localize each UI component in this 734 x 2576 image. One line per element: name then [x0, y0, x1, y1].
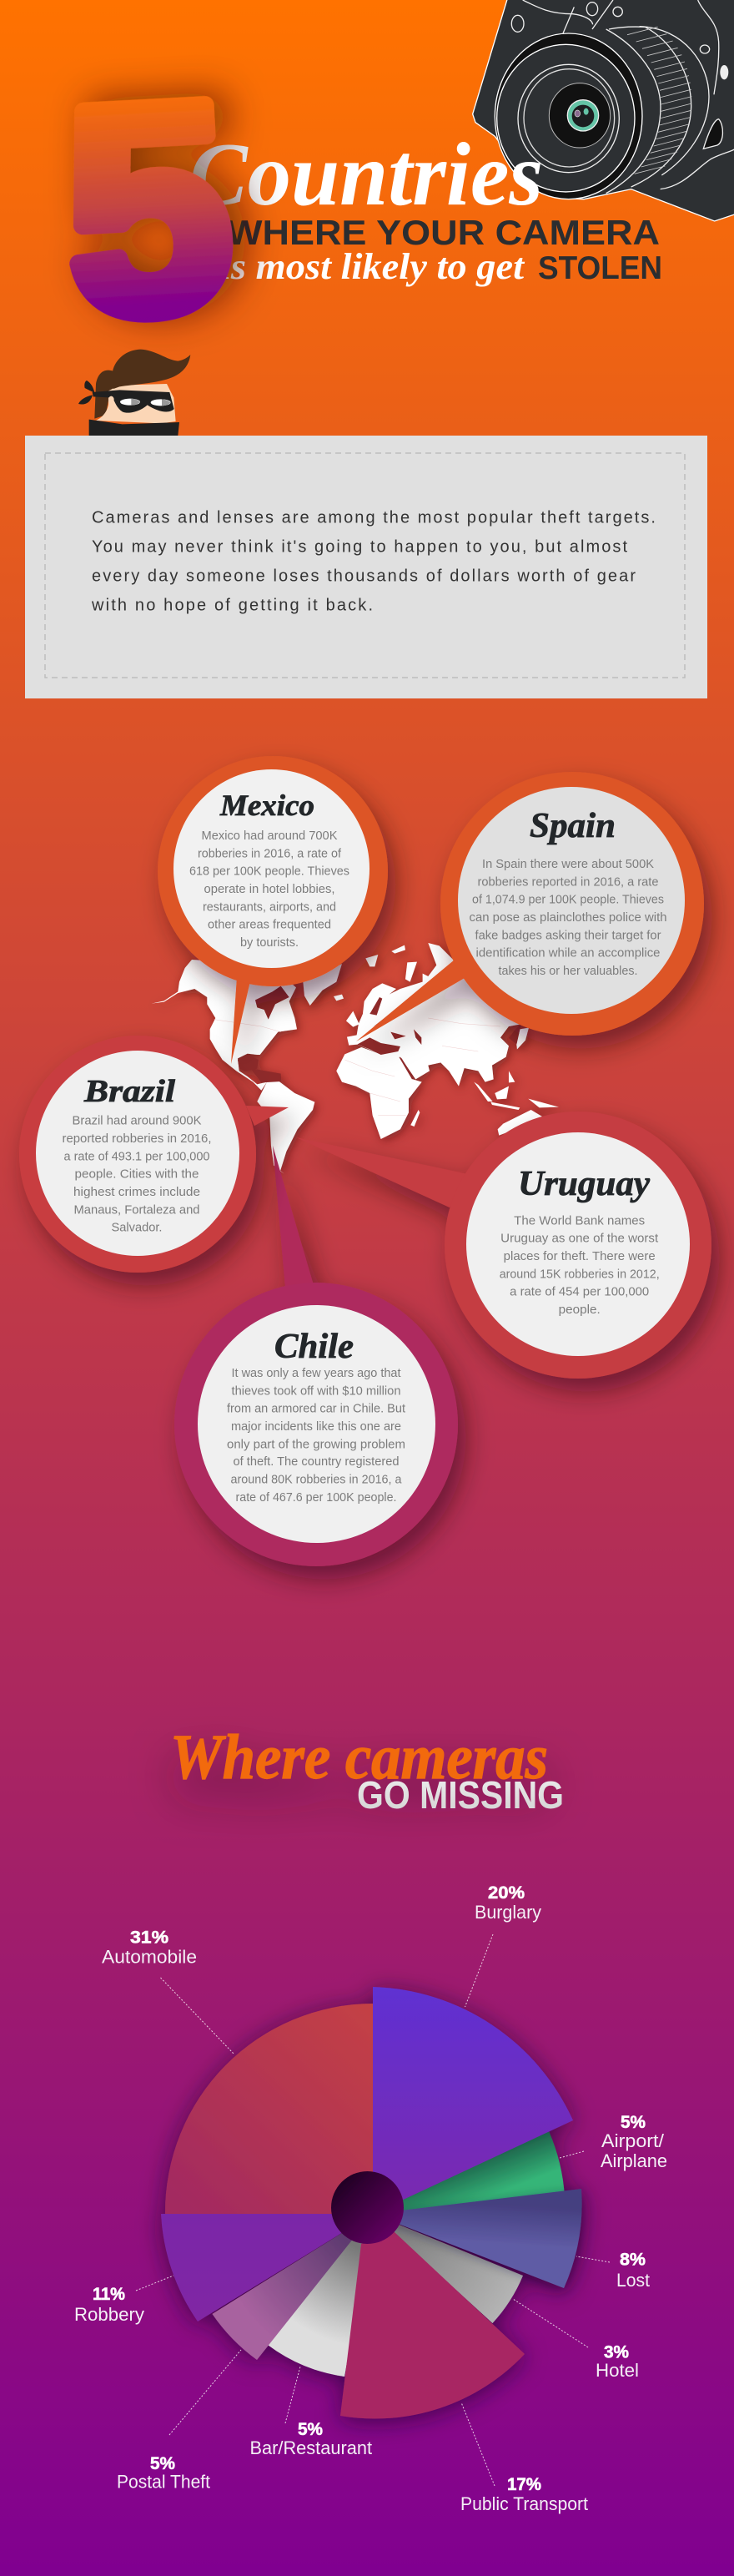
heading: Chile: Chile: [274, 1328, 354, 1366]
heading: Mexico: Mexico: [219, 789, 314, 822]
text: Chile description: only part of the growing problem: [227, 1438, 405, 1451]
text: Mexico description: Mexico had around 700K: [202, 829, 338, 843]
label: bar/restaurant 5%: [250, 2367, 372, 2458]
heading: where cameras: Where cameras: [170, 1722, 548, 1792]
label: public transport 17%: Public Transport: [460, 2493, 588, 2514]
text: Uruguay description: around 15K robberies in 2012,: [500, 1268, 660, 1281]
pie centre hole: [331, 2171, 404, 2244]
label: robbery 11%: Robbery: [74, 2304, 144, 2325]
text: Brazil description: people. Cities with the: [75, 1168, 199, 1182]
text: Chile description: of theft. The country registered: [234, 1455, 399, 1469]
slice: public transport: [340, 2231, 525, 2418]
callout: Mexico: [158, 756, 388, 1064]
label: public transport 17%: [460, 2402, 588, 2514]
text: Uruguay description: people.: [559, 1303, 601, 1317]
label: public transport 17%: 17%: [507, 2475, 541, 2494]
slice: airport: [373, 2131, 565, 2214]
panel: intro text: Cameras and lenses are among the most popular theft targets.: [92, 509, 656, 527]
panel: intro text: every day someone loses thousands of dollars worth of gear: [92, 567, 636, 586]
callout: Brazil: [19, 1036, 289, 1273]
text: Mexico description: by tourists.: [240, 936, 299, 950]
text: Chile description: rate of 467.6 per 100K people.: [235, 1491, 397, 1505]
text: Spain description: fake badges asking their target for: [475, 929, 661, 942]
label: hotel 3%: 3%: [604, 2343, 629, 2362]
text: Uruguay description: Uruguay as one of the worst: [500, 1233, 658, 1246]
text: Chile description: thieves took off with $10 million: [232, 1384, 400, 1398]
heading: Spain: Spain: [530, 807, 616, 845]
slice: robbery: [161, 2214, 373, 2321]
text: Brazil description: Salvador.: [112, 1222, 162, 1235]
label: automobile 31%: 31%: [130, 1928, 168, 1948]
label: lost 8%: Lost: [616, 2270, 650, 2291]
text: Mexico description: restaurants, airports, and: [203, 900, 336, 914]
slice: postal theft: [212, 2214, 373, 2360]
label: burglary 20%: 20%: [488, 1883, 525, 1903]
pie chart: [161, 1987, 582, 2418]
label: bar/restaurant 5%: 5%: [298, 2420, 323, 2439]
text: Spain description: [469, 858, 667, 978]
label: airport 5%: Airport/: [601, 2130, 665, 2151]
title: where your camera: WHERE YOUR CAMERA: [227, 213, 660, 252]
label: automobile 31%: Automobile: [102, 1946, 197, 1968]
text: Brazil description: a rate of 493.1 per 100,000: [63, 1150, 210, 1163]
slice: automobile: [165, 2004, 373, 2214]
text: Chile description: from an armored car in Chile. But: [227, 1403, 405, 1416]
text: Spain description: robberies reported in 2016, a rate: [477, 875, 659, 889]
text: Mexico description: other areas frequented: [208, 919, 331, 932]
label: lost 8%: [576, 2250, 650, 2291]
text: Chile description: It was only a few years ago that: [232, 1367, 400, 1380]
label: airport 5%: [560, 2113, 667, 2171]
label: hotel 3%: [513, 2299, 639, 2381]
text: Brazil description: Brazil had around 900K: [72, 1115, 202, 1128]
text: Chile description: [227, 1367, 405, 1505]
text: Brazil description: reported robberies in 2016,: [62, 1132, 212, 1146]
text: Brazil description: highest crimes include: [73, 1186, 200, 1199]
label: postal theft 5%: Postal Theft: [117, 2472, 210, 2492]
text: Brazil description: [62, 1115, 212, 1235]
text: Mexico description: [189, 829, 349, 950]
callout: Chile: [174, 1146, 458, 1566]
panel: intro text: You may never think it's going to happen to you, but almost: [92, 538, 627, 557]
label: hotel 3%: Hotel: [596, 2360, 639, 2381]
world map: [152, 943, 559, 1174]
label: robbery 11%: 11%: [93, 2285, 125, 2304]
slice: bar/restaurant: [268, 2214, 373, 2377]
slice: lost: [373, 2189, 582, 2288]
text: Spain description: of 1,074.9 per 100K people. Thieves: [472, 894, 664, 907]
text: Mexico description: 618 per 100K people. Thieves: [189, 865, 349, 879]
text: Uruguay description: a rate of 454 per 100,000: [510, 1286, 649, 1299]
text: Chile description: around 80K robberies in 2016, a: [230, 1474, 402, 1487]
text: Brazil description: Manaus, Fortaleza and: [73, 1203, 200, 1217]
label: lost 8%: 8%: [620, 2250, 646, 2270]
text: Spain description: In Spain there were about 500K: [482, 858, 654, 871]
label: automobile 31%: [102, 1928, 234, 2054]
label: postal theft 5%: [117, 2350, 241, 2492]
text: Mexico description: robberies in 2016, a rate of: [198, 847, 342, 860]
title: big number 5: 5: [58, 40, 239, 377]
label: burglary 20%: [465, 1883, 541, 2007]
text: Mexico description: operate in hotel lobbies,: [204, 883, 335, 896]
callout: Uruguay: [296, 1112, 711, 1379]
callout: Spain: [356, 772, 704, 1041]
label: postal theft 5%: 5%: [150, 2454, 175, 2473]
label: burglary 20%: Burglary: [475, 1902, 541, 1923]
text: Uruguay description: places for theft. There were: [504, 1250, 656, 1263]
label: bar/restaurant 5%: Bar/Restaurant: [250, 2437, 372, 2458]
text: Spain description: can pose as plainclothes police with: [469, 911, 667, 925]
label: robbery 11%: [74, 2276, 173, 2325]
icon: masked thief: [78, 350, 190, 436]
text: Chile description: major incidents like this one are: [231, 1420, 401, 1434]
text: Uruguay description: [500, 1214, 660, 1317]
title: is most likely to get: is most likely to get: [220, 246, 525, 287]
label: airport 5%: Airplane: [601, 2150, 667, 2171]
title: stolen: STOLEN: [538, 250, 662, 286]
text: Spain description: takes his or her valuables.: [499, 965, 637, 978]
panel: intro text: with no hope of getting it back.: [91, 597, 373, 615]
heading: go missing: GO MISSING: [357, 1773, 564, 1817]
slice: burglary: [373, 1987, 573, 2214]
heading: Uruguay: Uruguay: [518, 1165, 650, 1203]
text: Uruguay description: The World Bank names: [514, 1214, 645, 1228]
icon: camera: [473, 0, 734, 221]
slice: hotel: [373, 2214, 523, 2323]
label: airport 5%: 5%: [621, 2113, 646, 2132]
panel: intro text: [25, 436, 707, 698]
heading: Brazil: Brazil: [83, 1074, 175, 1109]
text: Spain description: identification while an accomplice: [475, 947, 661, 960]
title: Countries: Countries: [189, 125, 543, 224]
